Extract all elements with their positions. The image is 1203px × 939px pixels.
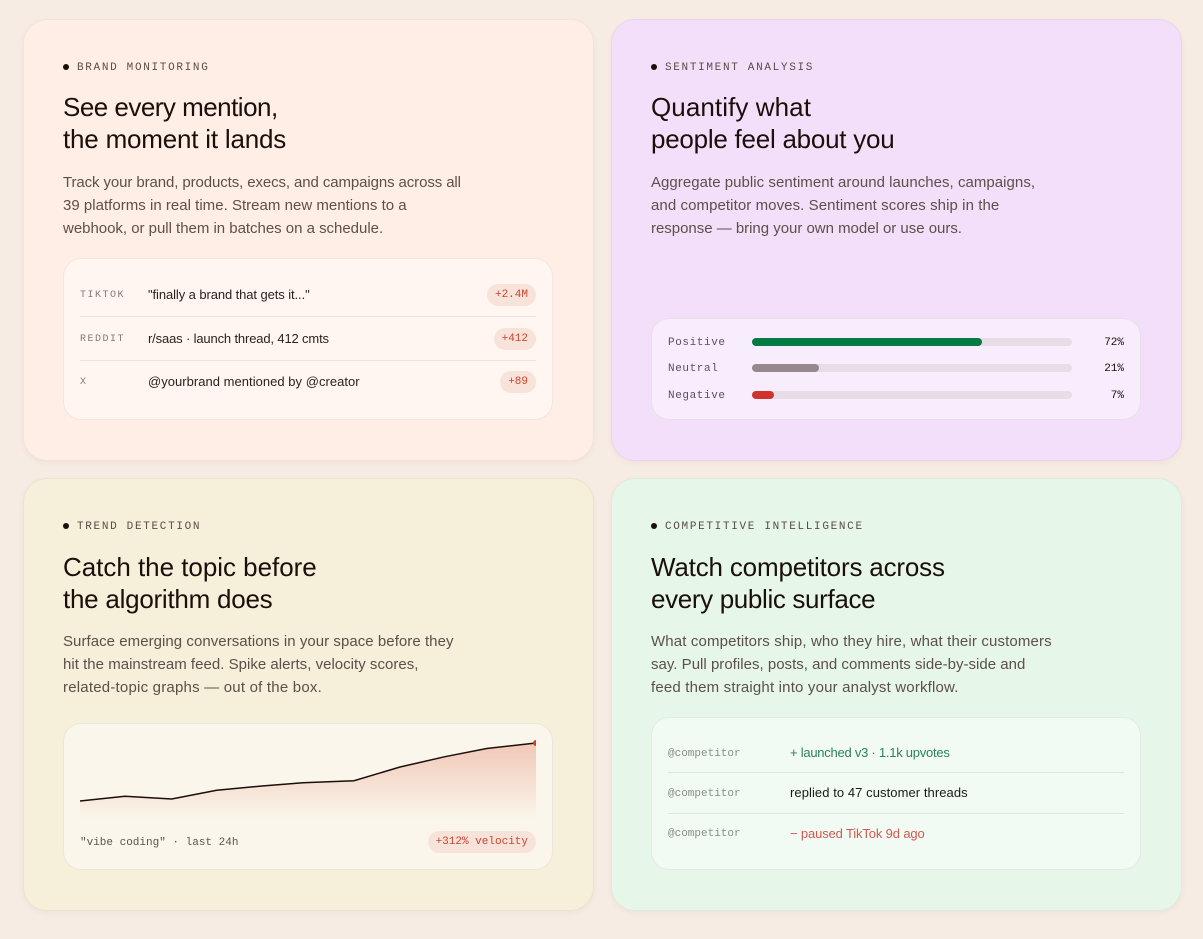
eyebrow: sentiment analysis: SENTIMENT ANALYSIS (665, 62, 814, 74)
heading: competitive intelligence (651, 552, 945, 614)
text block: brand monitoring description: webhook, or pull them in batches on a schedule. (63, 220, 383, 237)
competitor feed panel (651, 717, 1141, 870)
competitor row: paused: @competitor (668, 828, 741, 840)
text block: sentiment description: Aggregate public sentiment around launches, campaigns, (651, 174, 1035, 191)
text block: competitive description: feed them straight into your analyst workflow. (651, 679, 959, 696)
mention row: reddit: REDDIT (80, 334, 125, 345)
text block: sentiment description (651, 174, 1035, 237)
bar: positive (668, 337, 1124, 349)
bar: positive: Positive (668, 337, 726, 349)
eyebrow: trend detection: TREND DETECTION (77, 521, 201, 533)
heading: trend detection: Catch the topic before (63, 552, 317, 582)
competitor row: replied: replied to 47 customer threads (790, 785, 968, 800)
mention row: x (80, 371, 536, 393)
competitor row: launched (668, 745, 950, 760)
panel: brand monitoring (22, 18, 594, 460)
heading: competitive intelligence: Watch competitors across (651, 552, 945, 582)
heading: trend detection: the algorithm does (63, 584, 272, 614)
bar: negative: Negative (668, 390, 726, 402)
mention row: tiktok: +2.4M (495, 289, 528, 301)
text block: brand monitoring description: 39 platforms in real time. Stream new mentions to a (63, 197, 407, 214)
bar: neutral: 21% (1104, 363, 1124, 375)
text block: brand monitoring description (63, 174, 461, 237)
mention row: reddit (80, 328, 536, 350)
bar: negative: 7% (1111, 390, 1124, 402)
text block: competitive description (651, 633, 1052, 696)
mention row: x: @yourbrand mentioned by @creator (148, 374, 360, 389)
panel: sentiment analysis (610, 18, 1182, 460)
mention row: x: X (80, 377, 88, 388)
text block: trend description: related-topic graphs — out of the box. (63, 679, 322, 696)
heading: trend detection (63, 552, 317, 614)
competitor row: launched: @competitor (668, 748, 741, 760)
heading: sentiment analysis: people feel about you (651, 124, 894, 154)
text block: brand monitoring description: Track your brand, products, execs, and campaigns across all (63, 174, 461, 191)
text block: trend description: hit the mainstream feed. Spike alerts, velocity scores, (63, 656, 418, 673)
mention row: reddit: +412 (502, 333, 528, 345)
mention row: x: +89 (508, 376, 528, 388)
text block: sentiment description: and competitor moves. Sentiment scores ship in the (651, 197, 999, 214)
heading: sentiment analysis (651, 92, 894, 154)
competitor row: paused: − paused TikTok 9d ago (790, 826, 925, 841)
heading: brand monitoring (63, 92, 286, 154)
bar: neutral (668, 363, 1124, 375)
text block: sentiment description: response — bring your own model or use ours. (651, 220, 962, 237)
bar: neutral: Neutral (668, 363, 718, 375)
text block: trend description (63, 633, 454, 696)
heading: brand monitoring: See every mention, (63, 92, 278, 122)
heading: sentiment analysis: Quantify what (651, 92, 811, 122)
mention row: tiktok (80, 284, 536, 306)
competitor row: replied: @competitor (668, 788, 741, 800)
mention row: tiktok: "finally a brand that gets it..." (148, 287, 310, 302)
heading: brand monitoring: the moment it lands (63, 124, 286, 154)
panel: trend detection (22, 478, 594, 910)
trend chart panel (63, 723, 553, 870)
heading: competitive intelligence: every public surface (651, 584, 875, 614)
text block: competitive description: say. Pull profiles, posts, and comments side-by-side and (651, 656, 1025, 673)
panel: competitive intelligence (610, 478, 1182, 910)
bar: positive: 72% (1104, 337, 1124, 349)
mention row: reddit: r/saas · launch thread, 412 cmts (148, 331, 329, 346)
velocity badge (428, 831, 536, 853)
mention feed panel (63, 258, 553, 420)
chart caption: "vibe coding" · last 24h (80, 837, 238, 849)
text block: competitive description: What competitors ship, who they hire, what their customers (651, 633, 1052, 650)
text block: trend description: Surface emerging conversations in your space before they (63, 633, 454, 650)
competitor row: launched: + launched v3 · 1.1k upvotes (790, 745, 950, 760)
eyebrow: brand monitoring: BRAND MONITORING (77, 62, 210, 74)
bar: negative (668, 390, 1124, 402)
velocity badge: +312% velocity (436, 836, 528, 848)
competitor row: replied (668, 785, 968, 800)
line chart: trend velocity (80, 740, 536, 808)
sentiment bars panel (651, 318, 1141, 420)
mention row: tiktok: TIKTOK (80, 290, 125, 301)
eyebrow: competitive intelligence: COMPETITIVE INTELLIGENCE (665, 521, 864, 533)
competitor row: paused (668, 826, 925, 841)
